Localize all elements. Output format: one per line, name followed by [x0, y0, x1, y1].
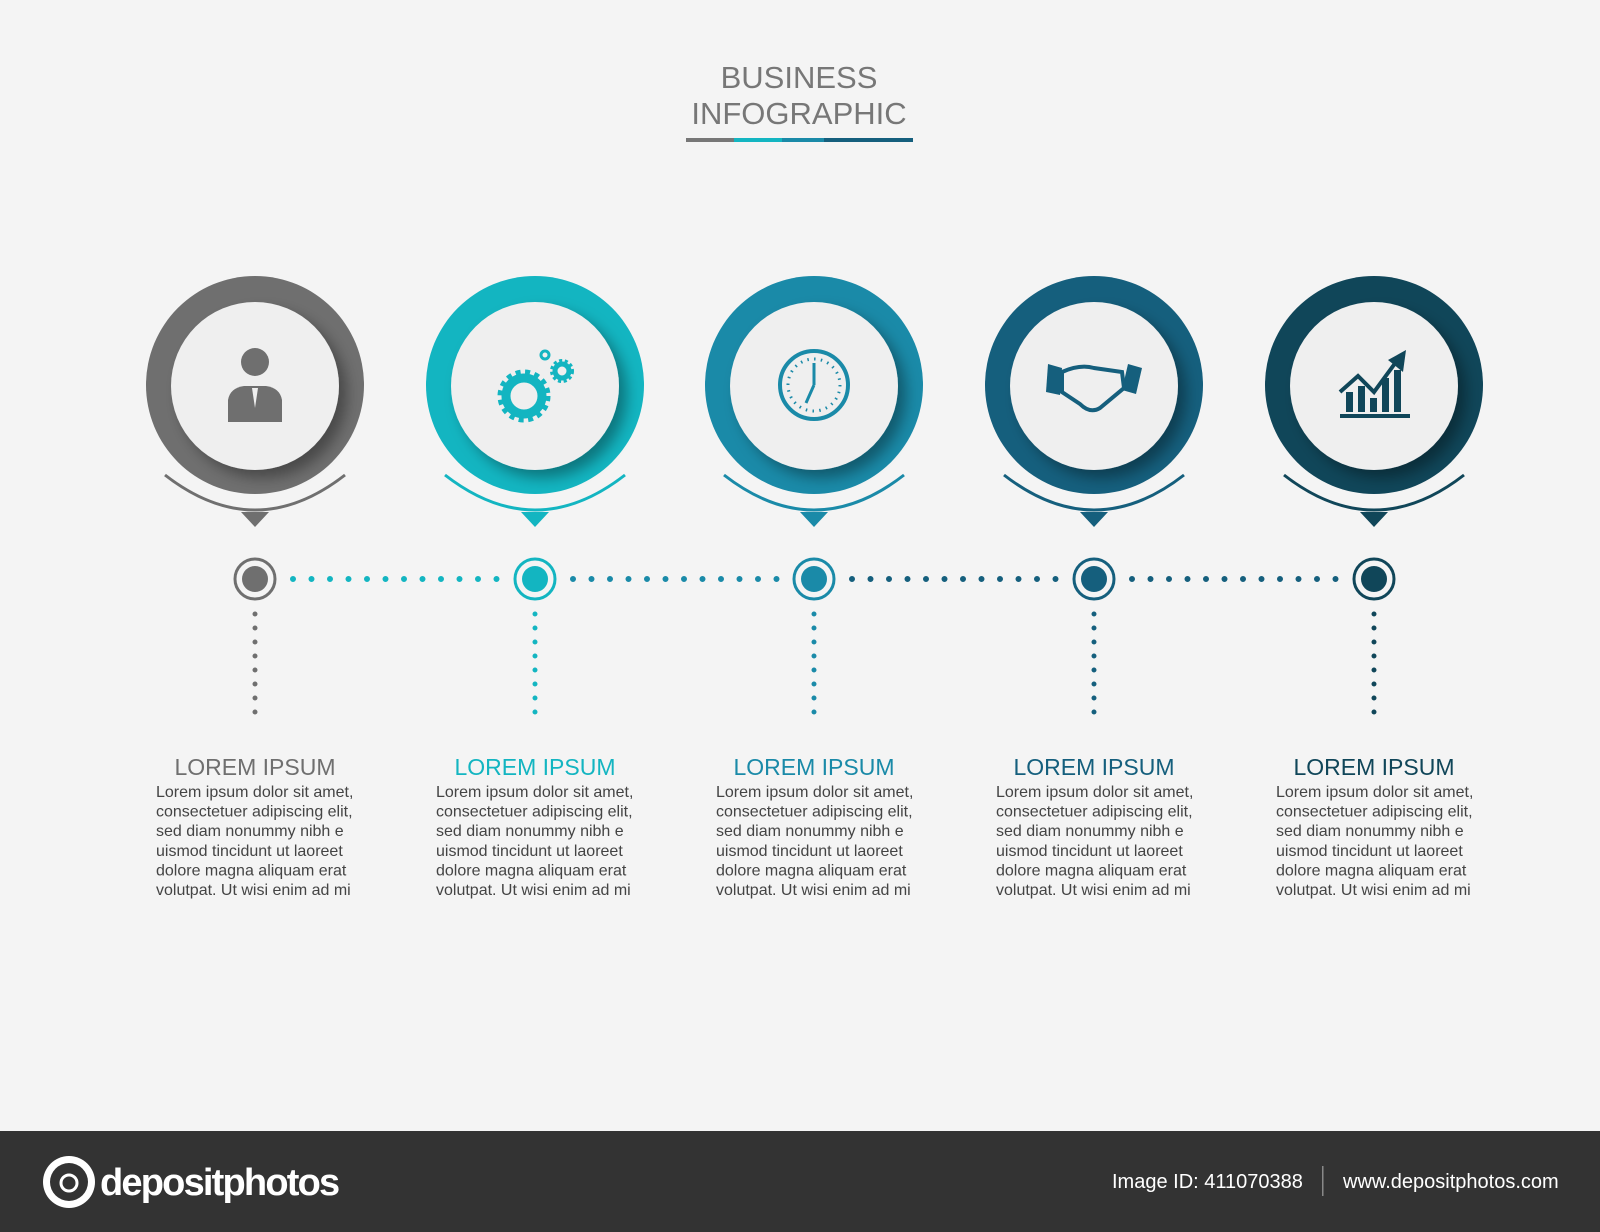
- body texts: dolore magna aliquam erat: [716, 862, 907, 879]
- body texts: consectetuer adipiscing elit,: [156, 804, 353, 821]
- footer bar: [0, 1131, 1600, 1232]
- icon: gears: [500, 351, 572, 420]
- title: [686, 60, 913, 142]
- body texts: sed diam nonummy nibh e: [156, 823, 344, 840]
- horizontal dotted timeline: [293, 576, 1340, 582]
- body texts: volutpat. Ut wisi enim ad mi: [156, 882, 351, 899]
- body texts: [156, 784, 1473, 899]
- step 1: LOREM IPSUM: [174, 754, 336, 780]
- body texts: Lorem ipsum dolor sit amet,: [156, 784, 353, 801]
- step 5: LOREM IPSUM: [1293, 754, 1455, 780]
- body texts: Lorem ipsum dolor sit amet,: [716, 784, 913, 801]
- icon: chart: [1340, 350, 1410, 418]
- step 4: LOREM IPSUM: [1013, 754, 1175, 780]
- body texts: volutpat. Ut wisi enim ad mi: [996, 882, 1191, 899]
- step 5: [1265, 276, 1483, 780]
- body texts: volutpat. Ut wisi enim ad mi: [436, 882, 631, 899]
- step 2: [426, 276, 644, 780]
- step 3: [705, 276, 923, 780]
- step 1: [146, 276, 364, 780]
- body texts: uismod tincidunt ut laoreet: [156, 843, 343, 860]
- body texts: consectetuer adipiscing elit,: [996, 804, 1193, 821]
- body texts: consectetuer adipiscing elit,: [1276, 804, 1473, 821]
- footer bar: www.depositphotos.com: [1342, 1171, 1559, 1193]
- body texts: uismod tincidunt ut laoreet: [1276, 843, 1463, 860]
- body texts: dolore magna aliquam erat: [1276, 862, 1467, 879]
- body texts: uismod tincidunt ut laoreet: [996, 843, 1183, 860]
- body texts: consectetuer adipiscing elit,: [716, 804, 913, 821]
- body texts: Lorem ipsum dolor sit amet,: [436, 784, 633, 801]
- icon: clock: [780, 351, 848, 419]
- body texts: sed diam nonummy nibh e: [1276, 823, 1464, 840]
- body texts: uismod tincidunt ut laoreet: [716, 843, 903, 860]
- body texts: sed diam nonummy nibh e: [996, 823, 1184, 840]
- body texts: dolore magna aliquam erat: [996, 862, 1187, 879]
- icon: handshake: [1046, 364, 1142, 410]
- body texts: consectetuer adipiscing elit,: [436, 804, 633, 821]
- step 4: [985, 276, 1203, 780]
- body texts: uismod tincidunt ut laoreet: [436, 843, 623, 860]
- body texts: Lorem ipsum dolor sit amet,: [996, 784, 1193, 801]
- title: INFOGRAPHIC: [691, 96, 907, 131]
- footer bar: depositphotos: [100, 1162, 339, 1204]
- body texts: Lorem ipsum dolor sit amet,: [1276, 784, 1473, 801]
- body texts: volutpat. Ut wisi enim ad mi: [1276, 882, 1471, 899]
- body texts: dolore magna aliquam erat: [436, 862, 627, 879]
- title: BUSINESS: [721, 60, 877, 95]
- step 3: LOREM IPSUM: [733, 754, 895, 780]
- icon: person: [228, 348, 282, 422]
- body texts: dolore magna aliquam erat: [156, 862, 347, 879]
- body texts: sed diam nonummy nibh e: [716, 823, 904, 840]
- step 2: LOREM IPSUM: [454, 754, 616, 780]
- footer bar: Image ID: 411070388: [1112, 1171, 1303, 1193]
- body texts: sed diam nonummy nibh e: [436, 823, 624, 840]
- body texts: volutpat. Ut wisi enim ad mi: [716, 882, 911, 899]
